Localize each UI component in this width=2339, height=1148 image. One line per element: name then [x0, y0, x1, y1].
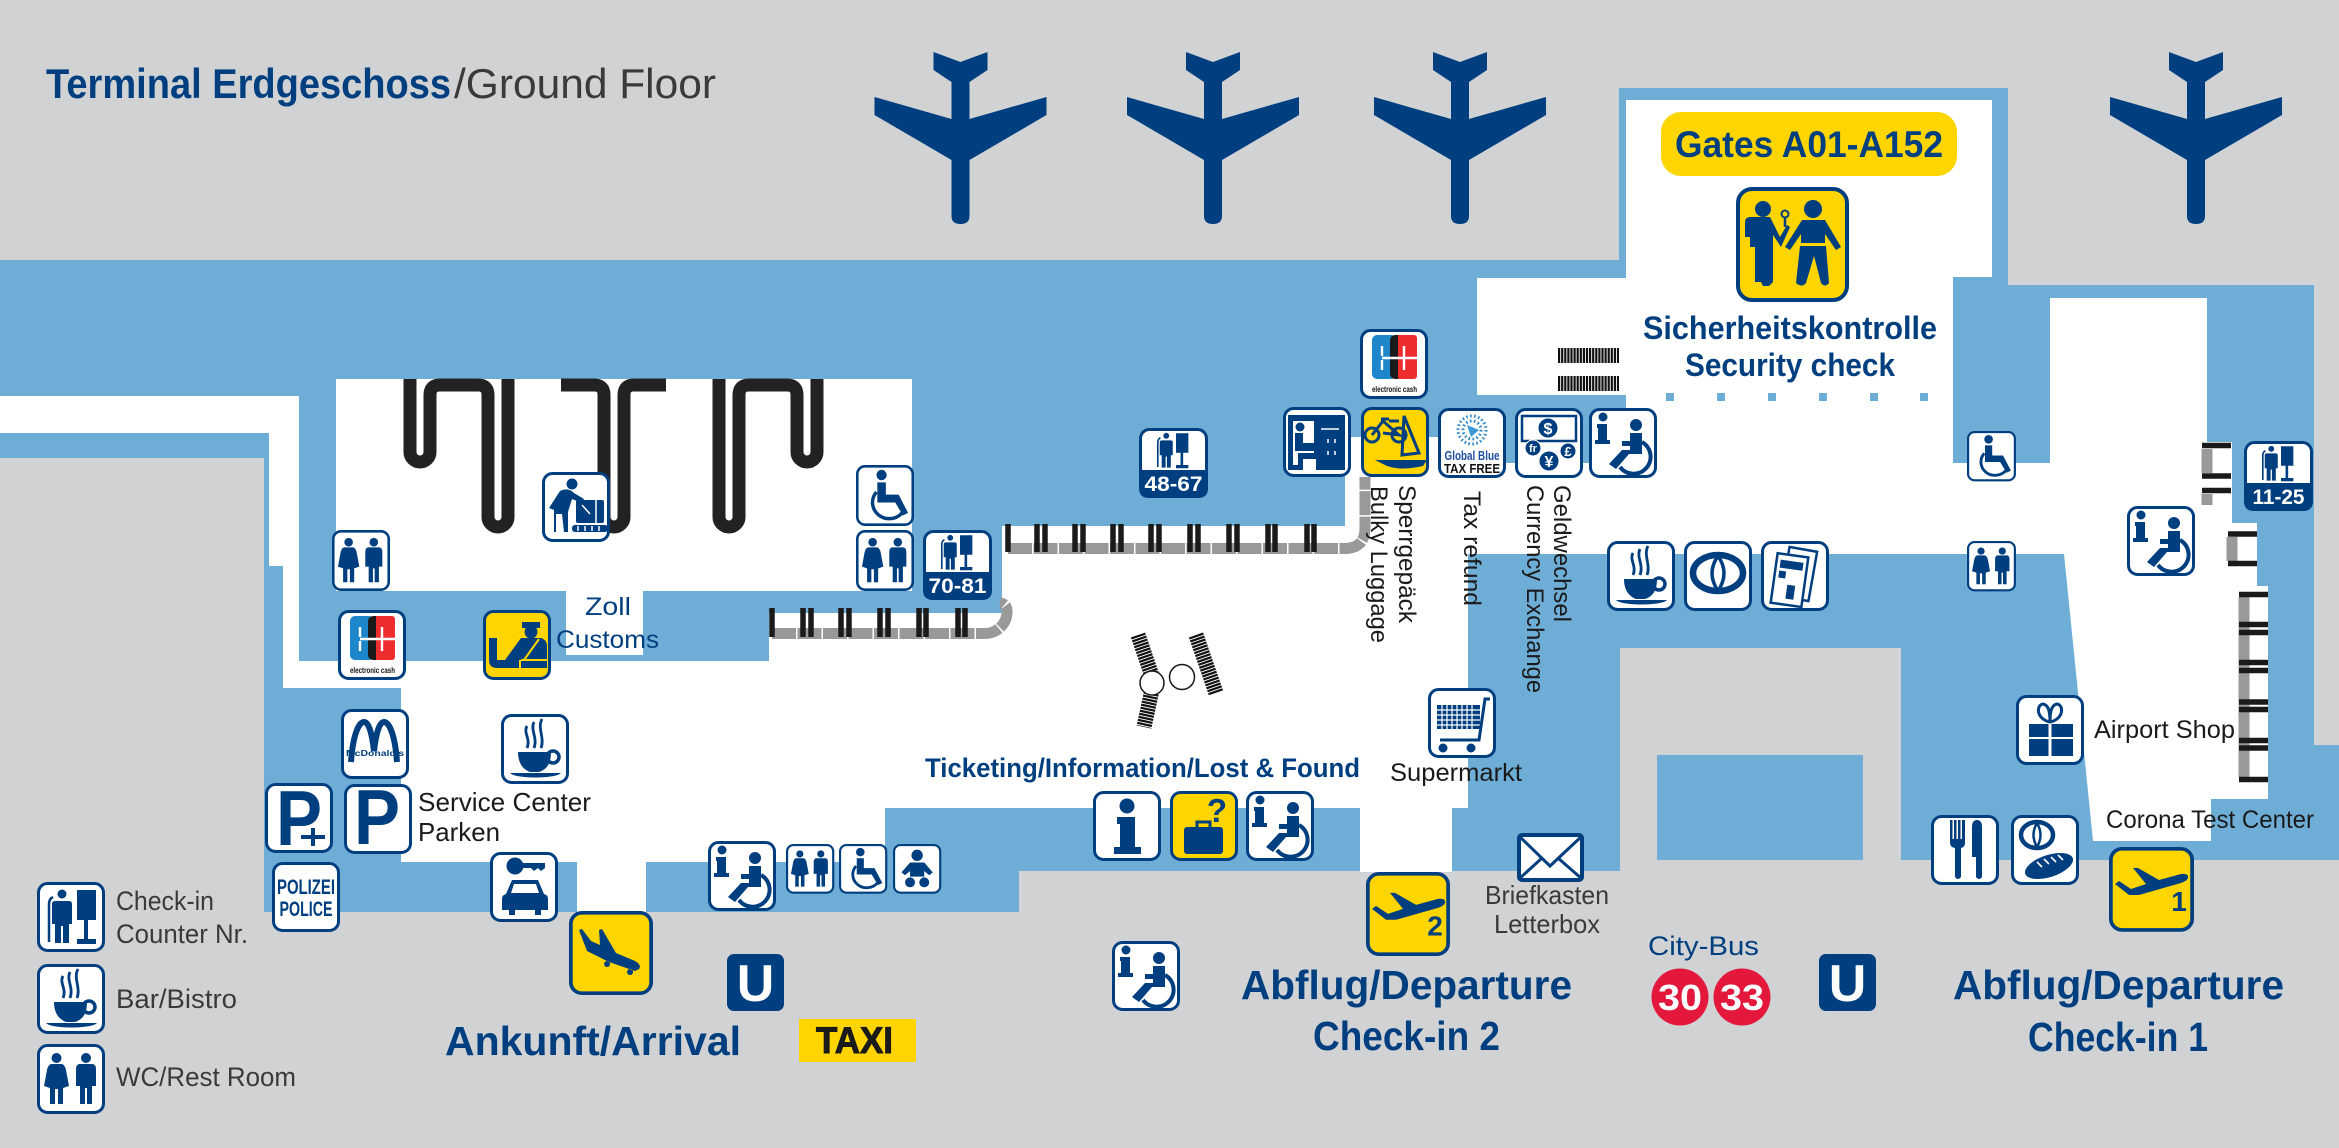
rotated labels: Bulky Luggage [1365, 486, 1392, 643]
security label [1643, 310, 1937, 383]
icon: bakery [2012, 816, 2078, 884]
title [46, 60, 716, 107]
icon: check-in 48-67: 48-67 [1144, 473, 1202, 496]
legend: rest room [38, 1046, 296, 1112]
icon: ec cash upper: electronic cash [1372, 385, 1417, 394]
departure 2 label [1241, 962, 1572, 1059]
icon: security check [1738, 189, 1847, 300]
icon: rest room arrivals [787, 845, 833, 893]
icon: bulky luggage [1362, 408, 1428, 476]
icon: currency exchange: fr [1529, 443, 1538, 455]
icon: customs [484, 612, 550, 678]
customs label [556, 593, 659, 654]
icon: airport shop [2018, 696, 2082, 764]
departure 1 label: Check-in 1 [2028, 1014, 2208, 1060]
supermarket label: Supermarkt [1390, 759, 1522, 787]
icon: departure 1: 1 [2171, 886, 2187, 917]
icon: departure 2 [1368, 874, 1448, 954]
icon: baggage claim [544, 474, 608, 540]
icon: subway left: U [737, 955, 774, 1013]
icon: wheelchair right [1968, 432, 2015, 480]
bus 33 [1714, 968, 1770, 1026]
service center label: Service Center [418, 787, 591, 817]
departure 2 label: Abflug/Departure [1241, 962, 1572, 1008]
icon: departure 2: 2 [1427, 911, 1443, 942]
security lane dots [1666, 393, 1928, 401]
legend: bar [38, 966, 237, 1032]
icon: check-in 48-67 [1139, 430, 1208, 498]
taxi sign [799, 1019, 916, 1062]
icon: rest room [857, 531, 913, 590]
title: /Ground Floor [454, 60, 716, 107]
icon: currency exchange: $ [1544, 421, 1553, 438]
taxi sign: TAXI [816, 1020, 893, 1061]
baggage belts [410, 379, 817, 527]
service center label: Parken [418, 817, 500, 847]
icon: police: POLIZEI [277, 876, 335, 899]
airplane 3 [1374, 52, 1546, 224]
icon: subway left [727, 954, 784, 1013]
icon: accessible information right [2128, 508, 2194, 574]
icon: ec cash: electronic cash [350, 666, 395, 675]
legend: rest room: WC/Rest Room [116, 1062, 296, 1092]
icon: parking plus: P [276, 774, 322, 862]
check-in rail lower [772, 603, 1007, 637]
icon: currency exchange [1516, 410, 1582, 476]
icon: check-in 11-25 [2244, 442, 2313, 511]
icon: mcdonalds: McDonald's [346, 749, 405, 758]
icon: lost and found: ? [1207, 792, 1227, 829]
icon: subway right [1819, 954, 1876, 1013]
city bus label: City-Bus [1648, 931, 1759, 961]
icon: accessible information upper [1590, 410, 1656, 476]
icon: global blue tax free: Global Blue [1444, 448, 1500, 463]
letterbox label [1485, 880, 1609, 939]
rotated labels: Sperrgepäck [1393, 485, 1420, 624]
icon: letterbox [1519, 835, 1582, 880]
icon: police: POLICE [280, 898, 332, 921]
icon: accessible information arrivals [710, 842, 774, 910]
legend [38, 884, 296, 1112]
icon: police [274, 864, 338, 930]
icon: lost and found [1172, 792, 1236, 860]
icon: baby changing [894, 845, 940, 893]
arrival label: Ankunft/Arrival [445, 1018, 741, 1064]
icon: subway right: U [1829, 955, 1866, 1013]
letterbox label: Letterbox [1494, 909, 1600, 939]
icon: arrival [571, 913, 651, 993]
icon: newspapers [1762, 542, 1828, 610]
icon: accessible information ticketing [1248, 792, 1312, 860]
icon: wheelchair arrivals [840, 845, 886, 893]
icon: rest room arrivals hall [333, 531, 389, 590]
gates label: Gates A01-A152 [1675, 124, 1943, 165]
rotated labels: Currency Exchange [1521, 485, 1548, 693]
airplane 4 [2110, 52, 2282, 224]
security gate bars [1558, 356, 1619, 384]
icon: information [1094, 792, 1160, 860]
icon: currency exchange: £ [1564, 444, 1572, 459]
departure 2 label: Check-in 2 [1313, 1013, 1500, 1059]
bus 33: 33 [1720, 977, 1764, 1018]
letterbox label: Briefkasten [1485, 880, 1609, 910]
icon: check-in 70-81: 70-81 [928, 575, 987, 598]
security label: Sicherheitskontrolle [1643, 310, 1937, 346]
departure 1 label [1953, 962, 2284, 1060]
icon: accessible information outside [1114, 942, 1178, 1010]
rotated labels: Tax refund [1458, 491, 1485, 606]
icon: bar bistro [1608, 542, 1674, 610]
icon: parking: P [354, 773, 400, 861]
icon: global blue tax free: TAX FREE [1444, 461, 1500, 476]
supermarket icon [1430, 690, 1494, 756]
security checkpoint [1643, 112, 1957, 401]
icon: mcdonalds [342, 710, 408, 778]
customs label: Customs [556, 626, 659, 654]
legend: bar: Bar/Bistro [116, 984, 237, 1014]
icon: restaurant [1932, 816, 1998, 884]
icon: ec cash [340, 612, 404, 678]
security label: Security check [1685, 347, 1895, 383]
corona test center label: Corona Test Center [2106, 806, 2314, 834]
ticketing label: Ticketing/Information/Lost & Found [925, 753, 1360, 783]
airport shop label: Airport Shop [2094, 716, 2235, 744]
airplane 1 [874, 52, 1046, 224]
icon: departure 1 [2111, 849, 2192, 930]
legend: check-in: Check-in [116, 886, 214, 916]
icon: rest room right [1968, 542, 2015, 590]
floor plan [0, 88, 2339, 912]
rotated labels: Geldwechsel [1548, 485, 1575, 622]
icon: check-in 11-25: 11-25 [2252, 486, 2305, 509]
departure 1 label: Abflug/Departure [1953, 962, 2284, 1008]
legend: check-in: Counter Nr. [116, 919, 248, 949]
icon: wheelchair [857, 466, 913, 525]
service center label [418, 787, 591, 847]
icon: waiting room [1284, 408, 1350, 476]
title: Terminal Erdgeschoss [46, 60, 451, 107]
check-in rail upper [1008, 477, 1365, 552]
legend: check-in [38, 884, 248, 950]
icon: currency exchange: ¥ [1545, 454, 1554, 471]
icon: check-in 70-81 [923, 532, 992, 600]
check-in rail right [2202, 446, 2268, 780]
icon: ec cash upper [1362, 330, 1426, 398]
rotated labels [1365, 485, 1575, 693]
bus 30 [1652, 968, 1708, 1026]
customs label: Zoll [585, 593, 631, 621]
icon: car rental [492, 854, 556, 920]
airplane 2 [1127, 52, 1299, 224]
baggage carousel symbol [1138, 635, 1216, 727]
icon: global blue tax free [1440, 410, 1504, 476]
icon: pretzel bakery [1686, 542, 1750, 610]
bus 30: 30 [1658, 977, 1702, 1018]
icon: coffee service center [502, 716, 568, 782]
gates label [1661, 112, 1957, 176]
